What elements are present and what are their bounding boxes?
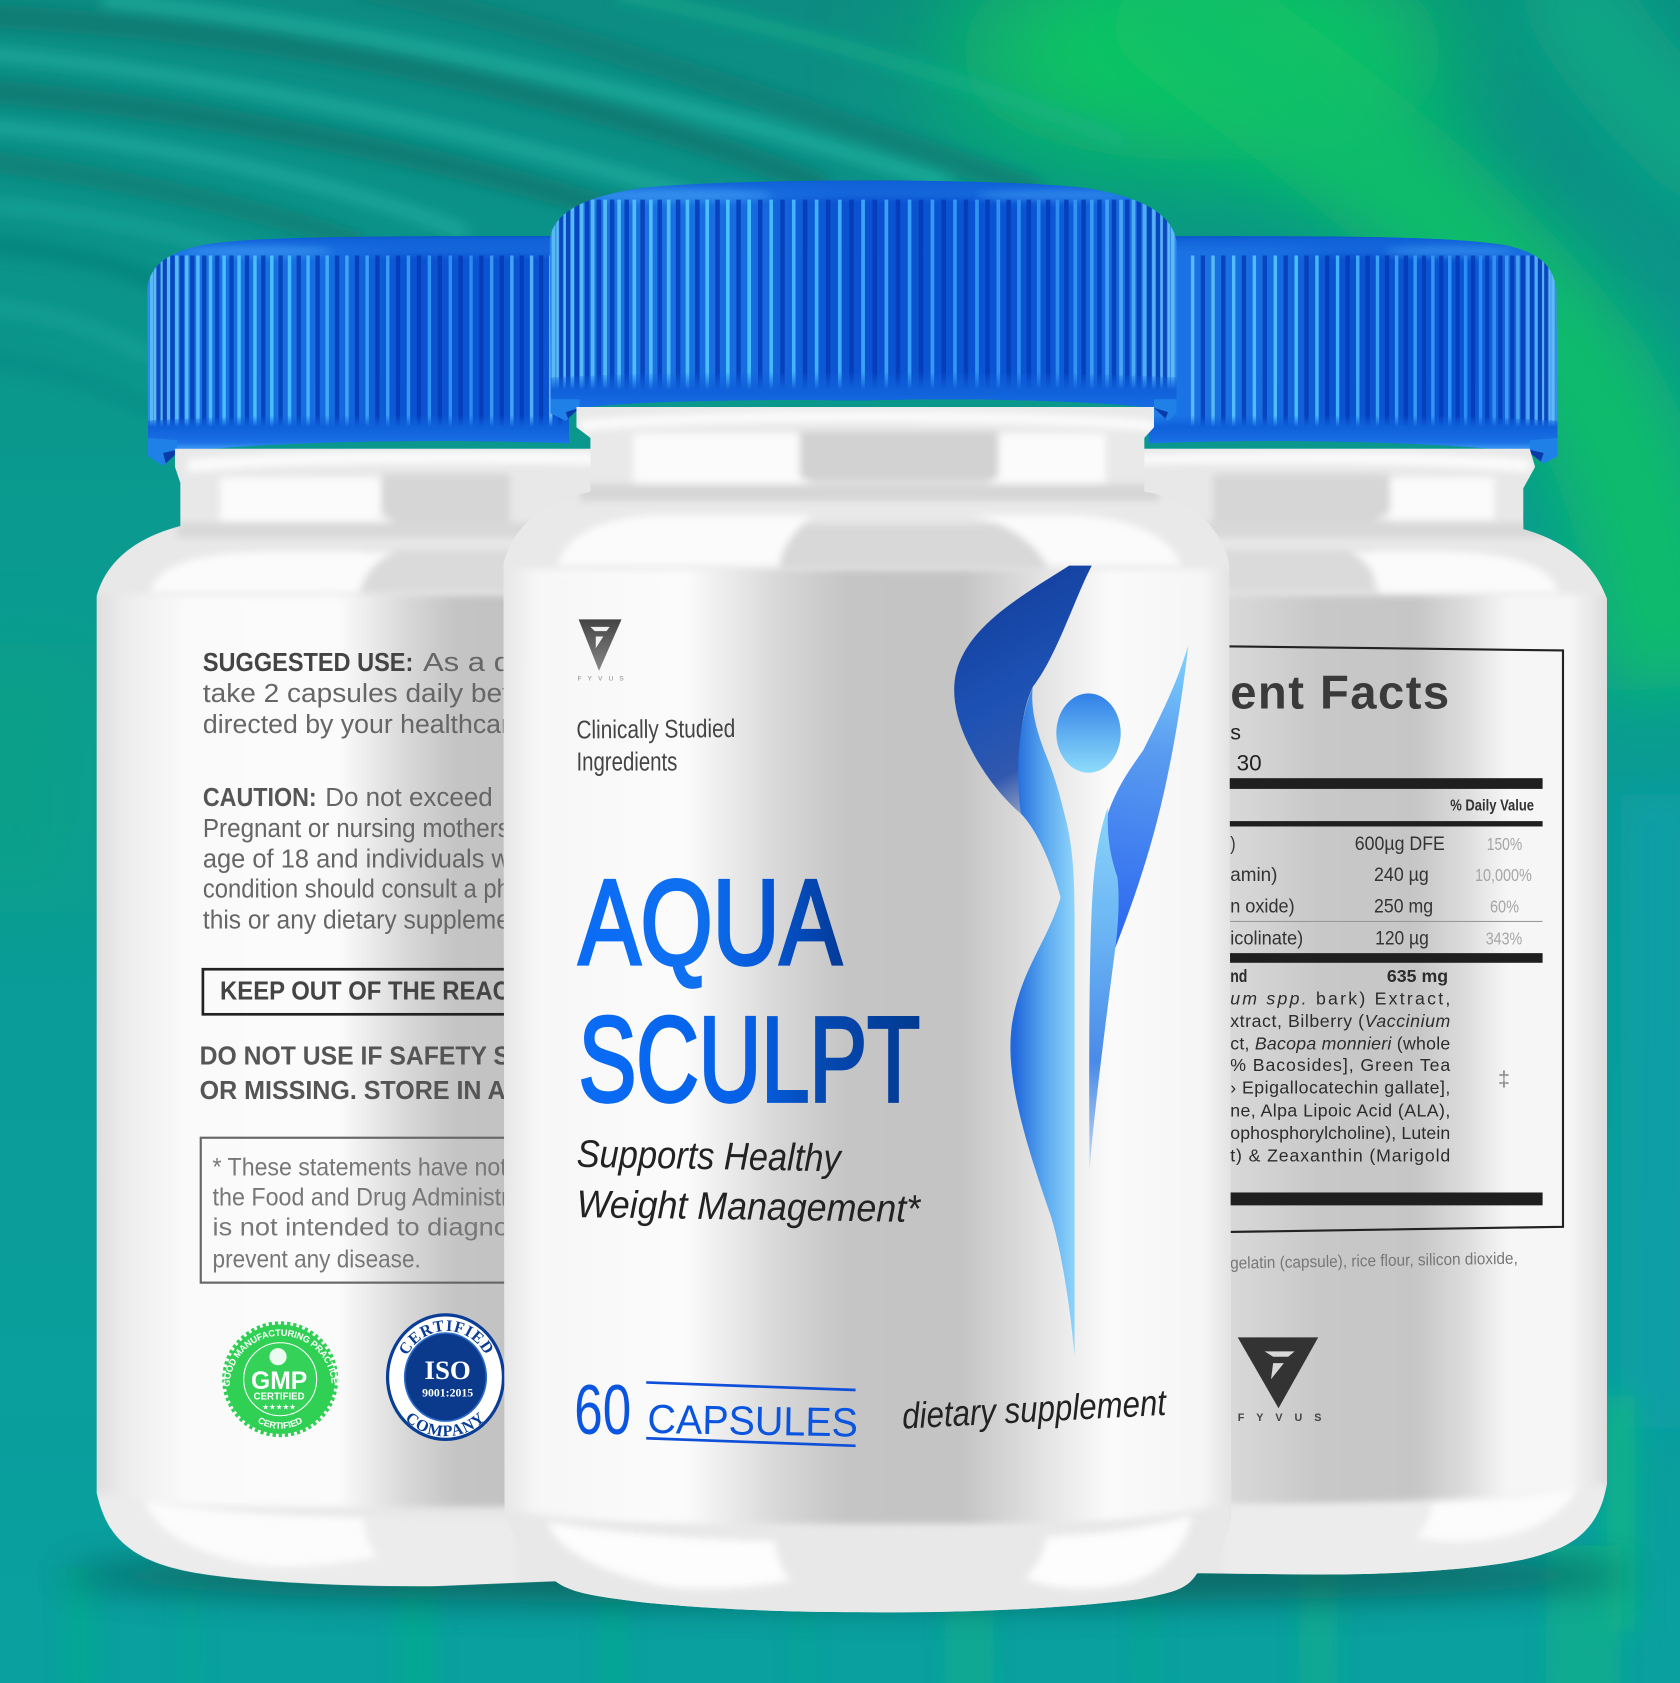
- supplement facts panel: ‡: [1498, 1067, 1510, 1091]
- count: 60 capsules: CAPSULES: [647, 1396, 858, 1446]
- supplement facts panel: [1213, 646, 1563, 1232]
- badge: GMP certified: [222, 1321, 338, 1438]
- badge: ISO 9001:2015: 9001:2015: [422, 1385, 473, 1399]
- badge: GMP certified: ★★★★★: [262, 1402, 296, 1411]
- bottle body: centre: [451, 403, 1288, 1621]
- label text: caution: CAUTION:: [203, 784, 317, 812]
- disclaimer box: prevent any disease.: [213, 1247, 421, 1274]
- count: 60 capsules: [574, 1371, 858, 1450]
- label text: caution: this or any dietary suppleme: [203, 906, 510, 934]
- proprietary blend: ct, Bacopa monnieri (whole: [1230, 1034, 1450, 1054]
- tagline: clinically studied: [576, 715, 735, 777]
- cap: centre: [542, 172, 1186, 429]
- label text: caution: [203, 784, 510, 934]
- nutrient rows: 240 µg: [1374, 865, 1429, 886]
- figure: head: [1056, 693, 1121, 773]
- other ingredients: gelatin (capsule), rice flour, silicon dioxide,: [1230, 1249, 1518, 1273]
- proprietary blend: 635 mg: [1387, 966, 1448, 986]
- badge: GMP certified: GOOD MANUFACTURING PRACTICE: [223, 1329, 338, 1386]
- proprietary blend: t) & Zeaxanthin (Marigold: [1230, 1145, 1450, 1165]
- label text: suggested use: As a d: [423, 649, 511, 677]
- figure: torso and hip: [1010, 687, 1075, 1356]
- proprietary blend: ophosphorylcholine), Lutein: [1230, 1123, 1450, 1143]
- keep out warning box: KEEP OUT OF THE REAC: [220, 977, 510, 1005]
- nutrient rows: [1230, 834, 1445, 950]
- icon: FYVUS logo, front: [578, 619, 624, 682]
- percent daily values: 150%: [1487, 834, 1522, 854]
- bottle: right, supplement facts: [1073, 231, 1675, 1599]
- safety warning: OR MISSING. STORE IN A: [200, 1077, 506, 1105]
- icon: FYVUS logo, front: FYVUS: [578, 675, 624, 682]
- disclaimer box: * These statements have not: [213, 1154, 507, 1181]
- percent daily values: 60%: [1490, 896, 1519, 916]
- serving lines: s: [1230, 721, 1241, 745]
- nutrient rows: ): [1230, 834, 1236, 855]
- dietary supplement: dietary supplement: [901, 1382, 1169, 1437]
- count: 60 capsules: 60: [574, 1371, 631, 1450]
- proprietary blend: nd: [1230, 966, 1247, 986]
- proprietary blend: [1230, 966, 1450, 1165]
- subtitle: supports healthy weight management: Weight Management*: [576, 1183, 922, 1231]
- product name: AQUA SCULPT: SCULPT: [579, 993, 920, 1127]
- daily value header: % Daily Value: [1450, 797, 1534, 814]
- label text: caution: Pregnant or nursing mothers: [203, 815, 510, 843]
- ground shadow: [64, 1548, 1632, 1604]
- label text: suggested use: take 2 capsules daily bet: [203, 680, 510, 708]
- tagline: clinically studied: Ingredients: [576, 749, 677, 777]
- percent daily values: 10,000%: [1475, 865, 1532, 885]
- percent daily values: 343%: [1486, 929, 1522, 949]
- label text: caution: condition should consult a ph: [203, 875, 510, 903]
- proprietary blend: um spp. bark) Extract,: [1230, 989, 1450, 1009]
- bottle: left, back label: [96, 192, 751, 1586]
- tagline: clinically studied: Clinically Studied: [576, 715, 735, 744]
- nutrient rows: amin): [1230, 865, 1277, 886]
- label text: caution: age of 18 and individuals w: [203, 845, 510, 873]
- figure: shoulder sweep: [954, 566, 1092, 814]
- serving lines: 30: [1237, 751, 1262, 776]
- product name: AQUA SCULPT: AQUA: [579, 856, 842, 990]
- figure: abstract blue body: [954, 566, 1188, 1356]
- badge: GMP certified: CERTIFIED: [258, 1418, 302, 1429]
- disclaimer box: [201, 1138, 544, 1283]
- proprietary blend: % Bacosides], Green Tea: [1230, 1055, 1450, 1075]
- icon: FYVUS logo, back: FYVUS: [1238, 1412, 1321, 1424]
- badge: GMP certified: CERTIFIED: [254, 1392, 305, 1403]
- cap: left: [147, 236, 569, 466]
- product name: AQUA SCULPT: [579, 856, 920, 1127]
- serving lines: [1230, 728, 1261, 770]
- figure: raised arm: [1108, 645, 1188, 948]
- proprietary blend: ne, Alpa Lipoic Acid (ALA),: [1230, 1100, 1450, 1120]
- label text: suggested use: [203, 649, 511, 739]
- safety warning: DO NOT USE IF SAFETY S: [200, 1043, 510, 1071]
- subtitle: supports healthy weight management: Supports Healthy: [576, 1133, 843, 1180]
- nutrient rows: 120 µg: [1375, 929, 1429, 950]
- cap: right: [1138, 231, 1562, 472]
- percent daily values: [1475, 834, 1532, 949]
- keep out warning box: [203, 969, 546, 1014]
- badge: GMP certified: GMP: [251, 1368, 307, 1395]
- icon: FYVUS logo, back: [1238, 1337, 1321, 1424]
- nutrient rows: 250 mg: [1374, 896, 1433, 917]
- label text: caution: Do not exceed: [325, 784, 493, 812]
- facts heading: ent Facts: [1230, 666, 1449, 719]
- label text: suggested use: directed by your healthcar: [203, 711, 510, 739]
- bottle body: left: [96, 448, 590, 1586]
- nutrient rows: 600µg DFE: [1355, 834, 1445, 855]
- badge: ISO 9001:2015: [386, 1313, 504, 1441]
- nutrient rows: icolinate): [1230, 929, 1303, 950]
- bottle: centre, front label: [451, 172, 1288, 1621]
- subtitle: supports healthy weight management: [576, 1133, 922, 1231]
- badge: ISO 9001:2015: COMPANY: [407, 1412, 484, 1436]
- disclaimer box: is not intended to diagno: [213, 1214, 509, 1241]
- safety warning: [200, 1046, 504, 1100]
- badge: ISO 9001:2015: CERTIFIED: [400, 1320, 492, 1354]
- proprietary blend: xtract, Bilberry (Vaccinium: [1230, 1011, 1450, 1031]
- badge: ISO 9001:2015: ISO: [425, 1355, 471, 1385]
- figure: leg: [1089, 807, 1119, 1171]
- table rules: [1213, 778, 1543, 1205]
- label text: suggested use: SUGGESTED USE:: [203, 649, 413, 677]
- disclaimer box: the Food and Drug Administr: [213, 1184, 509, 1211]
- proprietary blend: › Epigallocatechin gallate],: [1230, 1078, 1450, 1098]
- nutrient rows: n oxide): [1230, 896, 1295, 917]
- bottle body: right: [1144, 448, 1607, 1575]
